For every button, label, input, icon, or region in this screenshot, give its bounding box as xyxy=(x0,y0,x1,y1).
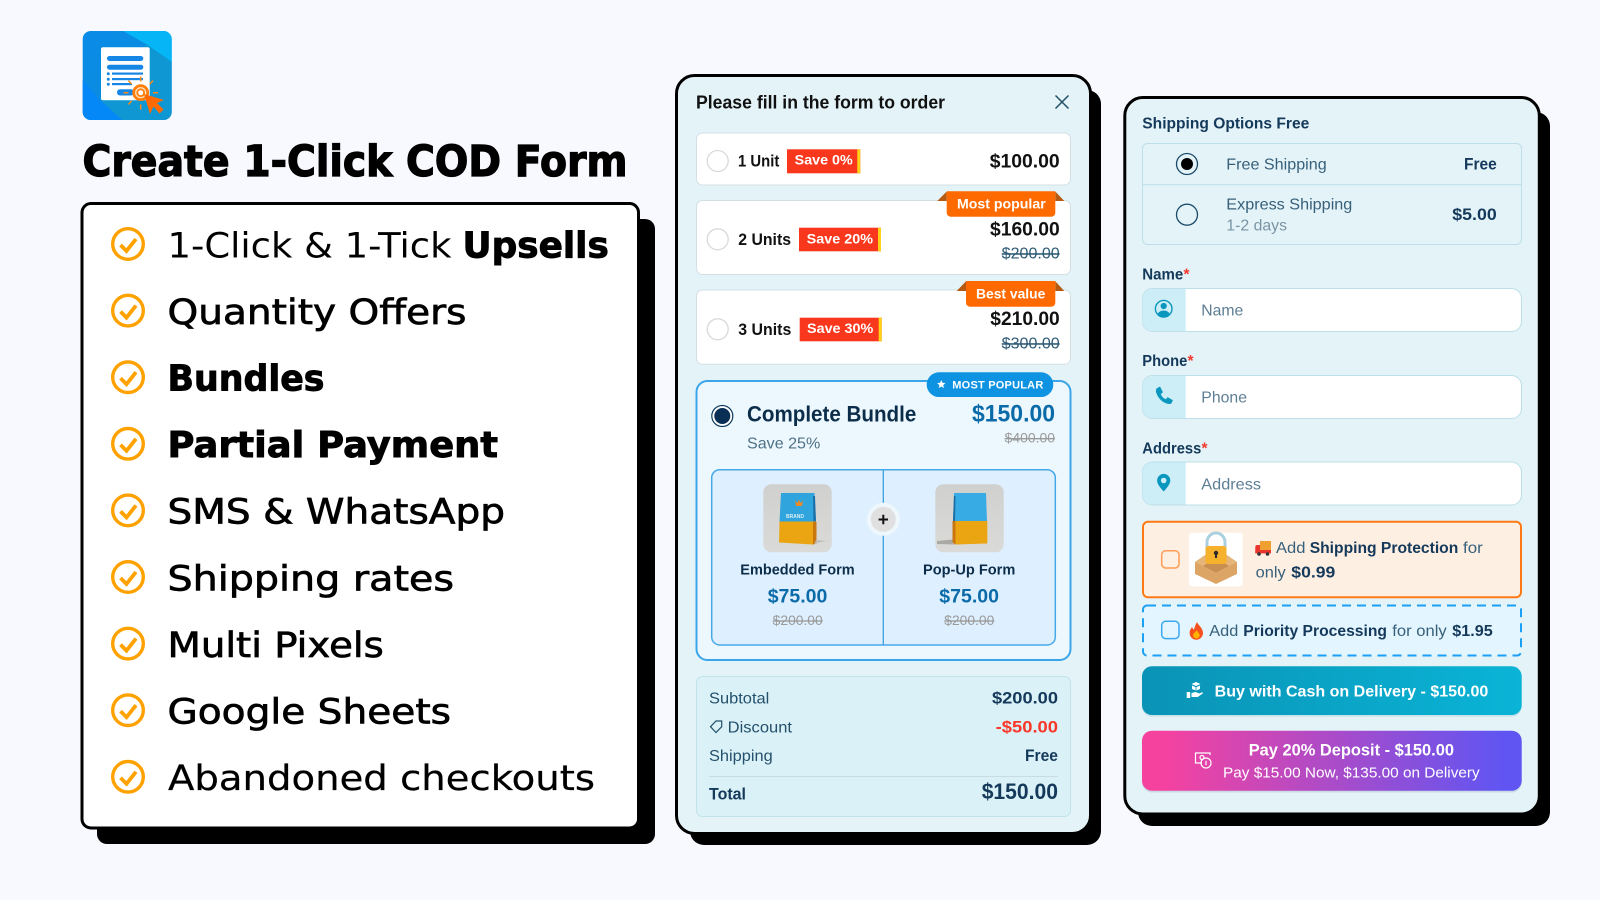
icon: hand with parcel xyxy=(1187,682,1203,698)
offer card: 2 Units: Save 20% xyxy=(807,230,874,246)
bundle items box xyxy=(712,470,1055,645)
order summary: -$50.00 xyxy=(996,718,1058,736)
upsell: shipping protection: Shipping Protection xyxy=(1310,540,1458,557)
field: phone: Phone xyxy=(1201,389,1247,406)
bundle heading: Complete Bundle xyxy=(747,401,916,426)
product image: embedded form bag xyxy=(763,484,832,552)
button: cash on delivery xyxy=(1142,666,1522,717)
feature row: Abandoned checkouts: Abandoned checkouts xyxy=(168,759,595,799)
offer card: 1 Unit: Save 0% xyxy=(795,152,853,168)
field: address: * xyxy=(1202,440,1208,457)
item: pop-up form xyxy=(923,562,1015,628)
upsell: shipping protection xyxy=(1143,522,1521,597)
button: partial deposit: Pay 20% Deposit - $150.00 xyxy=(1249,742,1454,760)
icon: phone xyxy=(1156,386,1173,404)
feature row: Quantity Offers: Quantity Offers xyxy=(168,293,466,333)
shipping options xyxy=(1142,144,1522,244)
button: partial deposit: Pay $15.00 Now, $135.00 on Delivery xyxy=(1223,765,1480,782)
shipping options: Free xyxy=(1464,156,1497,174)
field: name: Name xyxy=(1142,266,1184,283)
icon: close xyxy=(1056,96,1068,108)
offer card: 3 Units xyxy=(696,281,1070,364)
title: Create 1-Click COD Form xyxy=(82,138,628,187)
icon: user xyxy=(1155,300,1172,317)
icon: delivery truck xyxy=(1255,541,1271,556)
order summary: Shipping xyxy=(709,748,773,765)
offer card: 1 Unit: 1 Unit xyxy=(738,153,780,171)
upsell: priority processing: $1.95 xyxy=(1452,623,1493,640)
item: embedded form: $75.00 xyxy=(768,585,827,607)
icon: cash deposit xyxy=(1196,753,1211,768)
upsell: shipping protection: Add xyxy=(1276,540,1306,557)
field: address xyxy=(1142,440,1522,505)
offer card: 2 Units xyxy=(696,191,1070,274)
field: name xyxy=(1142,266,1522,332)
field: name: Name xyxy=(1201,303,1243,320)
bundle saving: Save 25% xyxy=(747,435,820,452)
feature row: 1-Click & 1-Tick Upsells: 1-Click & 1-Tick xyxy=(168,226,452,266)
offer card: 3 Units: 3 Units xyxy=(738,321,791,339)
item: embedded form: Embedded Form xyxy=(740,562,855,579)
offer card: 2 Units: 2 Units xyxy=(738,231,791,249)
button: partial deposit xyxy=(1142,731,1522,792)
order summary: $200.00 xyxy=(992,689,1058,707)
panel: shipping and customer form xyxy=(1125,98,1550,826)
icon: map pin xyxy=(1157,474,1170,492)
feature row: Bundles: Bundles xyxy=(168,358,324,400)
bundle old price: $400.00 xyxy=(1005,431,1055,446)
shipping options: Free Shipping xyxy=(1226,156,1327,173)
upsell: priority processing xyxy=(1143,606,1521,656)
offer card: 2 Units: $200.00 xyxy=(1002,245,1060,262)
product image: embedded form bag: BRAND xyxy=(786,514,804,520)
offer card: 3 Units: Save 30% xyxy=(807,320,874,336)
badge: most popular: MOST POPULAR xyxy=(952,379,1043,391)
offer card: 1 Unit: $100.00 xyxy=(990,151,1060,173)
field: address: Address xyxy=(1201,476,1261,493)
plus connector xyxy=(867,503,900,536)
product image: pop-up form bag xyxy=(935,484,1004,552)
field: phone: Phone xyxy=(1142,353,1188,370)
feature row: SMS & WhatsApp: SMS & WhatsApp xyxy=(168,493,505,533)
bundle card xyxy=(696,372,1070,660)
item: pop-up form: $75.00 xyxy=(939,585,999,607)
order summary: $150.00 xyxy=(982,779,1058,804)
shipping options: 1-2 days xyxy=(1226,218,1287,235)
item: pop-up form: Pop-Up Form xyxy=(923,562,1015,579)
order summary: Discount xyxy=(728,719,793,736)
panel: order form xyxy=(676,76,1101,845)
feature row: 1-Click & 1-Tick Upsells xyxy=(113,225,609,266)
upsell: shipping protection: only xyxy=(1256,565,1286,582)
selected radio xyxy=(712,406,733,426)
offer card: 3 Units: $210.00 xyxy=(990,308,1060,330)
feature row: 1-Click & 1-Tick Upsells: Upsells xyxy=(462,225,609,266)
order summary: Subtotal xyxy=(709,690,769,707)
panel: feature checklist xyxy=(82,204,655,844)
shipping heading: Shipping Options Free xyxy=(1142,115,1309,132)
upsell: priority processing: for only xyxy=(1392,623,1447,640)
offer card: 3 Units: $300.00 xyxy=(1002,335,1060,352)
order summary: Total xyxy=(709,785,746,803)
form heading: Please fill in the form to order xyxy=(696,92,945,113)
icon: app logo xyxy=(83,31,172,120)
icon: discount tag xyxy=(710,721,722,732)
offer card: 2 Units: Most popular xyxy=(957,195,1046,211)
order summary: Free xyxy=(1025,747,1058,765)
upsell: shipping protection: for xyxy=(1463,540,1483,557)
shipping options: $5.00 xyxy=(1452,206,1497,224)
feature row: Shipping rates: Shipping rates xyxy=(168,559,454,599)
upsell: priority processing: Add xyxy=(1209,623,1238,640)
offer card: 1 Unit xyxy=(696,133,1070,185)
feature row: Partial Payment: Partial Payment xyxy=(168,425,498,466)
upsell: priority processing: Priority Processing xyxy=(1243,623,1387,640)
image: locked parcel xyxy=(1189,533,1243,586)
button: cash on delivery: Buy with Cash on Delivery - $150.00 xyxy=(1215,684,1488,701)
offer card: 3 Units: Best value xyxy=(976,285,1045,301)
item: pop-up form: $200.00 xyxy=(944,613,994,628)
icon: fire xyxy=(1190,622,1203,640)
feature row: Google Sheets: Google Sheets xyxy=(168,692,451,732)
field: phone xyxy=(1142,353,1522,418)
feature row: Multi Pixels: Multi Pixels xyxy=(168,626,384,666)
field: name: * xyxy=(1184,266,1190,283)
shipping options: Express Shipping xyxy=(1226,196,1352,213)
field: address: Address xyxy=(1142,440,1201,457)
bundle price: $150.00 xyxy=(972,401,1055,428)
field: phone: * xyxy=(1188,353,1194,370)
item: embedded form xyxy=(740,562,855,628)
upsell: shipping protection: $0.99 xyxy=(1291,565,1335,582)
item: embedded form: $200.00 xyxy=(773,613,823,628)
badge: most popular xyxy=(927,372,1053,397)
order summary xyxy=(696,676,1070,816)
offer card: 2 Units: $160.00 xyxy=(990,218,1060,240)
